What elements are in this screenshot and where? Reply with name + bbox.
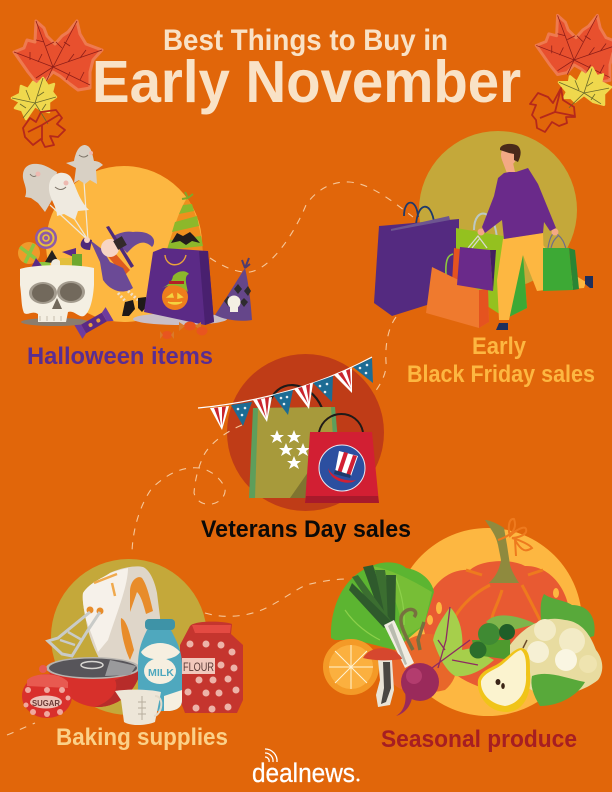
icon: lime and green bag <box>456 214 527 317</box>
icon: chard leaf <box>432 607 494 676</box>
icon: round candy <box>18 242 40 264</box>
label: Early Black Friday sales: Early <box>472 333 527 360</box>
icon: shopper <box>478 144 593 330</box>
hat crown <box>112 232 154 253</box>
icon: orange slice <box>323 639 379 695</box>
icon: star bag handle <box>268 385 322 408</box>
icon: skull bowl <box>20 265 94 326</box>
icon: purple bag with pumpkin <box>144 248 214 325</box>
balloon strings <box>50 182 88 240</box>
illustration: Veterans Day bags <box>198 357 379 503</box>
hair <box>500 144 521 162</box>
head <box>501 145 517 165</box>
label: Baking supplies: Baking supplies <box>56 724 228 751</box>
autumn leaves: top left <box>12 21 102 147</box>
icon: cauliflower <box>510 619 602 695</box>
back leg <box>540 245 586 290</box>
icon: right green bag handle <box>548 233 566 249</box>
icon: flour bag <box>180 622 243 713</box>
icon: measuring cup <box>115 690 161 725</box>
icon: flour bag: FLOUR <box>183 660 214 674</box>
icon: leek <box>349 565 414 668</box>
icon: pear <box>478 640 530 712</box>
icon: small purple bag <box>457 236 496 291</box>
background circle: Black Friday <box>419 131 577 289</box>
background circle: Seasonal produce <box>394 528 582 716</box>
icon: cabbage <box>331 562 434 650</box>
icon: top green leaves <box>541 594 595 640</box>
icon: purple party hat with skull <box>215 258 252 321</box>
icon: pumpkin <box>423 519 570 690</box>
illustration: Halloween items <box>18 145 252 339</box>
icon: sugar pot: SUGAR <box>32 699 60 708</box>
icon: red cake pan <box>46 657 141 707</box>
icon: yellow maple leaf <box>12 78 56 124</box>
dashed route connecting the sections <box>7 182 413 735</box>
neck and hands <box>502 158 515 176</box>
label: Halloween items: Halloween items <box>27 343 213 370</box>
icon: ghost centre <box>49 173 89 220</box>
icon: mushroom <box>363 648 402 707</box>
icon: red maple leaf <box>536 15 612 82</box>
title: Early November <box>92 49 521 115</box>
label: Veterans Day sales: Veterans Day sales <box>201 516 411 543</box>
face <box>101 239 119 257</box>
background circle: Veterans Day <box>227 354 384 511</box>
background circle: Halloween <box>46 166 202 322</box>
right green bag body <box>543 248 573 291</box>
icon: bottom green leaf <box>531 674 585 706</box>
icon: orange candies <box>160 322 208 339</box>
icon: red maple leaf <box>14 21 102 90</box>
bag shadow <box>133 313 227 325</box>
icon: star bag <box>249 407 343 498</box>
trousers <box>497 233 545 320</box>
illustration: Seasonal produce <box>323 519 602 716</box>
illustration: Baking supplies <box>22 566 243 725</box>
icon: striped party hat on bag <box>166 192 203 253</box>
label: Early Black Friday sales <box>407 333 595 388</box>
label: Seasonal produce: Seasonal produce <box>381 726 577 753</box>
icon: small pumpkin under leek <box>390 609 457 693</box>
sweets in the bowl <box>31 248 82 269</box>
icon: bunting <box>198 357 373 430</box>
icon: outlined leaf <box>530 88 575 132</box>
hat brim <box>106 226 134 268</box>
icon: ghost left <box>23 164 57 212</box>
autumn leaves: top right <box>530 15 612 132</box>
dress <box>90 240 133 292</box>
icon: lollipop <box>35 227 57 249</box>
icon: milk bottle: MILK <box>148 668 175 679</box>
icon: witch <box>81 226 154 316</box>
icon: orange bag <box>426 248 490 328</box>
icon: yellow maple leaf <box>559 68 611 108</box>
hair <box>106 252 130 276</box>
icon: milk bottle <box>138 619 182 711</box>
shoe <box>496 323 508 330</box>
illustration: Early Black Friday shopper <box>374 144 593 330</box>
sweater <box>482 168 556 239</box>
background circle: Baking <box>51 559 207 715</box>
title: Best Things to Buy in <box>163 24 448 57</box>
icon: broccoli <box>470 615 536 660</box>
logo: dealnews: dealnews <box>252 758 355 788</box>
legs and boots <box>118 291 138 303</box>
icon: beet <box>396 663 439 716</box>
icon: ghost top <box>66 145 103 184</box>
buckle <box>113 236 127 250</box>
icon: hand mixer <box>48 566 162 668</box>
icon: wrapped candy <box>74 307 114 339</box>
label: Early Black Friday sales: Black Friday sales <box>407 361 595 388</box>
icon: large purple bag <box>374 203 459 316</box>
ghost faces <box>30 155 88 190</box>
icon: sugar pot <box>22 665 72 718</box>
icon: outlined leaf <box>23 110 65 147</box>
icon: red bag <box>305 414 379 503</box>
